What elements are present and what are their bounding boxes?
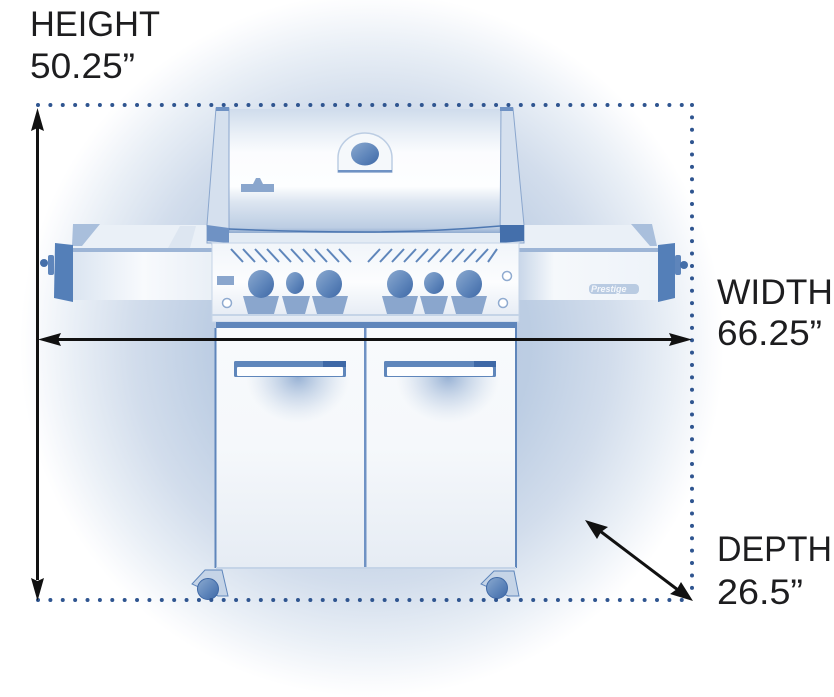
cabinet (216, 322, 516, 569)
height label (30, 5, 160, 86)
right caster wheel (481, 571, 519, 598)
right door shadow (396, 377, 500, 423)
drip bar (216, 322, 516, 328)
shelf logo (589, 284, 639, 294)
right side shelf: Prestige (591, 284, 627, 294)
lid thermometer (338, 133, 392, 172)
depth label: 26.5” (717, 573, 803, 612)
right side shelf (519, 224, 688, 302)
control panel (212, 243, 519, 322)
vents (231, 249, 497, 262)
width label: WIDTH (717, 273, 833, 312)
dotted dimension box (38, 105, 692, 600)
height arrow (31, 108, 44, 601)
grill lid (207, 107, 524, 243)
height label: HEIGHT (30, 5, 160, 44)
panel label (217, 276, 234, 285)
depth label: DEPTH (717, 530, 832, 569)
depth label (717, 530, 832, 612)
depth arrow (585, 520, 693, 601)
left door handle (234, 361, 346, 377)
left caster wheel (192, 570, 228, 600)
control knobs (243, 270, 487, 314)
right door handle (384, 361, 496, 377)
grill illustration (40, 107, 688, 600)
width label: 66.25” (717, 314, 822, 353)
left door shadow (246, 377, 350, 423)
width label (717, 273, 833, 353)
width arrow (38, 333, 692, 346)
height label: 50.25” (30, 47, 135, 86)
igniter buttons (222, 272, 512, 308)
brand logo (241, 178, 274, 192)
left side shelf (40, 224, 213, 302)
